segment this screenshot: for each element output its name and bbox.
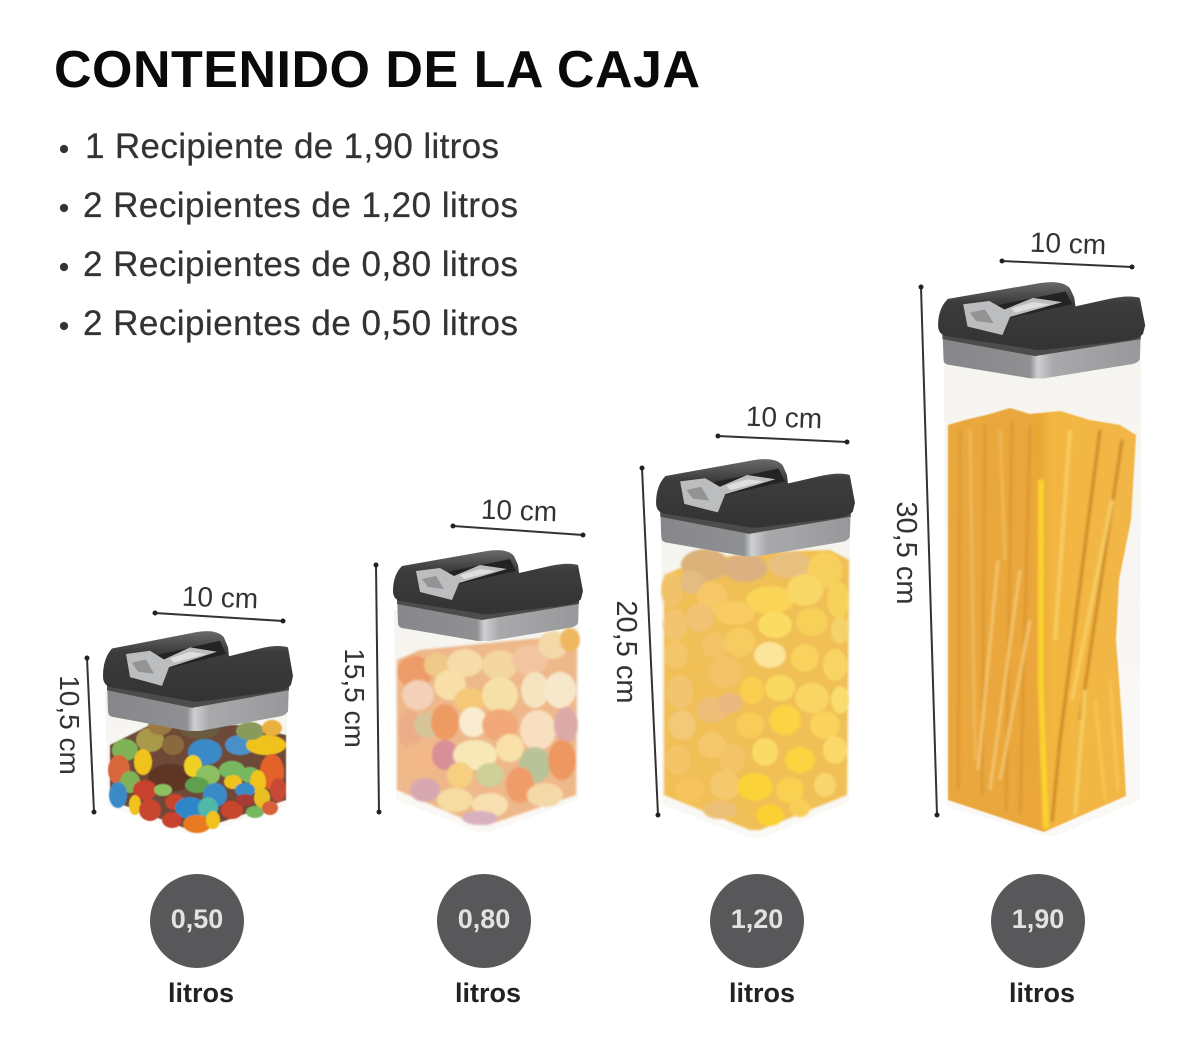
container 1,20 L with yellow pasta (656, 459, 855, 838)
capacity badge 0,50 litros: litros (168, 978, 234, 1008)
list item: 0,80 litros: 2 Recipientes de 0,80 litros (83, 245, 518, 284)
dimension: width jar 2: 10 cm (480, 494, 558, 527)
dimension: height jar 4 (890, 284, 940, 818)
container 1,90 L with spaghetti (938, 282, 1145, 836)
capacity badge 1,20 litros (710, 874, 804, 1008)
list item: 1,90 litros: 1 Recipiente de 1,90 litros (85, 127, 499, 166)
dimension: width jar 1: 10 cm (181, 581, 259, 614)
capacity badge 1,20 litros: litros (729, 978, 795, 1008)
capacity badge 1,90 litros (991, 874, 1085, 1008)
list of box contents (60, 127, 518, 343)
dimension: height jar 4: 30,5 cm (890, 501, 922, 605)
title: CONTENIDO DE LA CAJA (54, 41, 700, 99)
capacity badge 0,80 litros (437, 874, 531, 1008)
dimension: height jar 1: 10,5 cm (54, 675, 85, 775)
list item: 1,20 litros: 2 Recipientes de 1,20 litros (83, 186, 518, 225)
dimension: height jar 2: 15,5 cm (339, 648, 370, 748)
dimension: height jar 2 (339, 562, 382, 814)
dimension: width jar 3 (716, 401, 850, 444)
capacity badge 0,80 litros: litros (455, 978, 521, 1008)
dimension: height jar 3: 20,5 cm (610, 600, 642, 704)
dimension: width jar 3: 10 cm (745, 401, 823, 434)
capacity badge 0,80 litros: 0,80 (458, 904, 510, 934)
dimension: width jar 4: 10 cm (1029, 227, 1107, 260)
container 0,80 L with shell pasta (393, 550, 583, 832)
dimension: width jar 1 (152, 581, 286, 624)
capacity badge 0,50 litros (150, 874, 244, 1008)
capacity badge 1,90 litros: litros (1009, 978, 1075, 1008)
list item: 0,50 litros: 2 Recipientes de 0,50 litros (83, 304, 518, 343)
dimension: height jar 1 (54, 656, 96, 814)
container 0,50 L with candies (103, 631, 293, 834)
capacity badge 1,20 litros: 1,20 (731, 904, 783, 934)
dimension: height jar 3 (610, 466, 660, 818)
dimension: width jar 4 (1000, 227, 1134, 270)
dimension: width jar 2 (450, 494, 586, 538)
capacity badge 1,90 litros: 1,90 (1012, 904, 1064, 934)
capacity badge 0,50 litros: 0,50 (171, 904, 223, 934)
